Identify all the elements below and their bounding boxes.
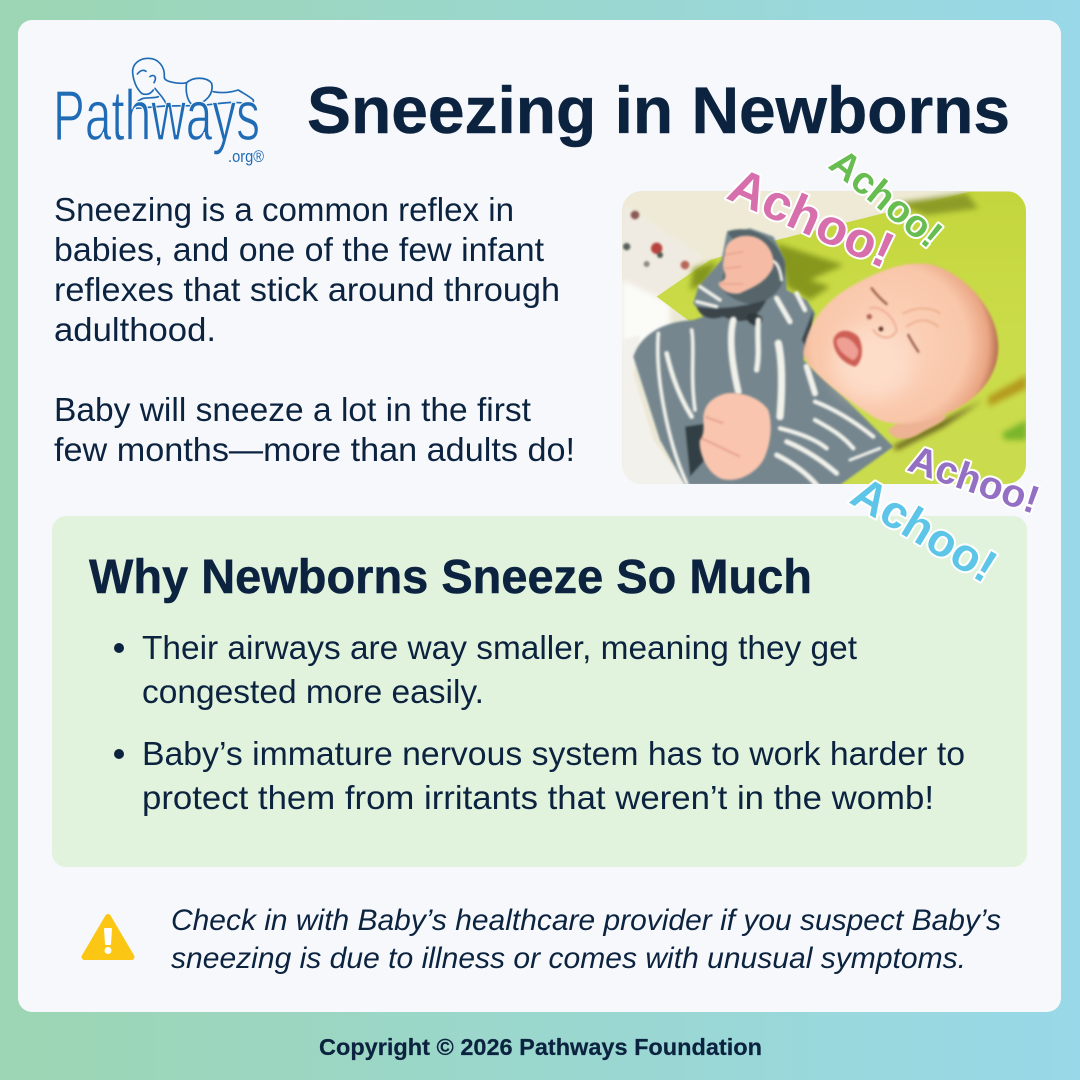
panel heading: Why Newborns Sneeze So Much <box>89 551 812 604</box>
bullet two: Baby’s immature nervous system has to work harder to <box>142 735 965 772</box>
copyright footer: Copyright © 2026 Pathways Foundation <box>319 1034 762 1060</box>
intro text block: few months—more than adults do! <box>54 431 575 468</box>
logo: Pathways.org <box>53 58 264 166</box>
warning note text: sneezing is due to illness or comes with unusual symptoms. <box>171 942 966 975</box>
sound effect: pink Achoo: Achoo! <box>721 157 902 279</box>
warning note text: Check in with Baby’s healthcare provider if you suspect Baby’s <box>171 904 1001 937</box>
bullet one: Their airways are way smaller, meaning they get <box>142 629 857 666</box>
title: Sneezing in Newborns <box>307 73 1010 147</box>
logo wordmark: Pathways <box>53 76 260 156</box>
intro text block: Sneezing is a common reflex in <box>54 191 514 228</box>
baby hands <box>700 236 774 480</box>
bullet one: congested more easily. <box>142 673 484 710</box>
blanket with floral pattern <box>622 195 698 344</box>
baby head <box>803 264 998 424</box>
icon: baby on tummy outline <box>133 58 253 108</box>
sound effect: purple Achoo: Achoo! <box>903 438 1045 522</box>
intro text block: babies, and one of the few infant <box>54 231 544 268</box>
bullet two: protect them from irritants that weren’t in the womb! <box>142 779 934 816</box>
logo .org: .org® <box>228 147 264 166</box>
icon: warning triangle <box>84 917 132 957</box>
striped sweater <box>633 228 893 485</box>
sound effect: blue Achoo: Achoo! <box>843 466 1006 592</box>
bullet one <box>114 629 857 710</box>
green pillow <box>657 192 1027 485</box>
intro text block <box>54 191 575 468</box>
sound effect: green Achoo: Achoo! <box>821 141 950 256</box>
green panel: why newborns sneeze <box>52 516 1027 867</box>
baby ear <box>888 414 947 439</box>
white undershirt <box>622 335 687 485</box>
photo: sneezing baby <box>622 190 1027 485</box>
baby face features <box>833 288 940 367</box>
bullet two <box>114 735 965 816</box>
intro text block: reflexes that stick around through <box>54 271 560 308</box>
intro text block: adulthood. <box>54 311 216 348</box>
warning note text <box>171 904 1001 975</box>
intro text block: Baby will sneeze a lot in the first <box>54 391 531 428</box>
panel background <box>52 516 1027 867</box>
